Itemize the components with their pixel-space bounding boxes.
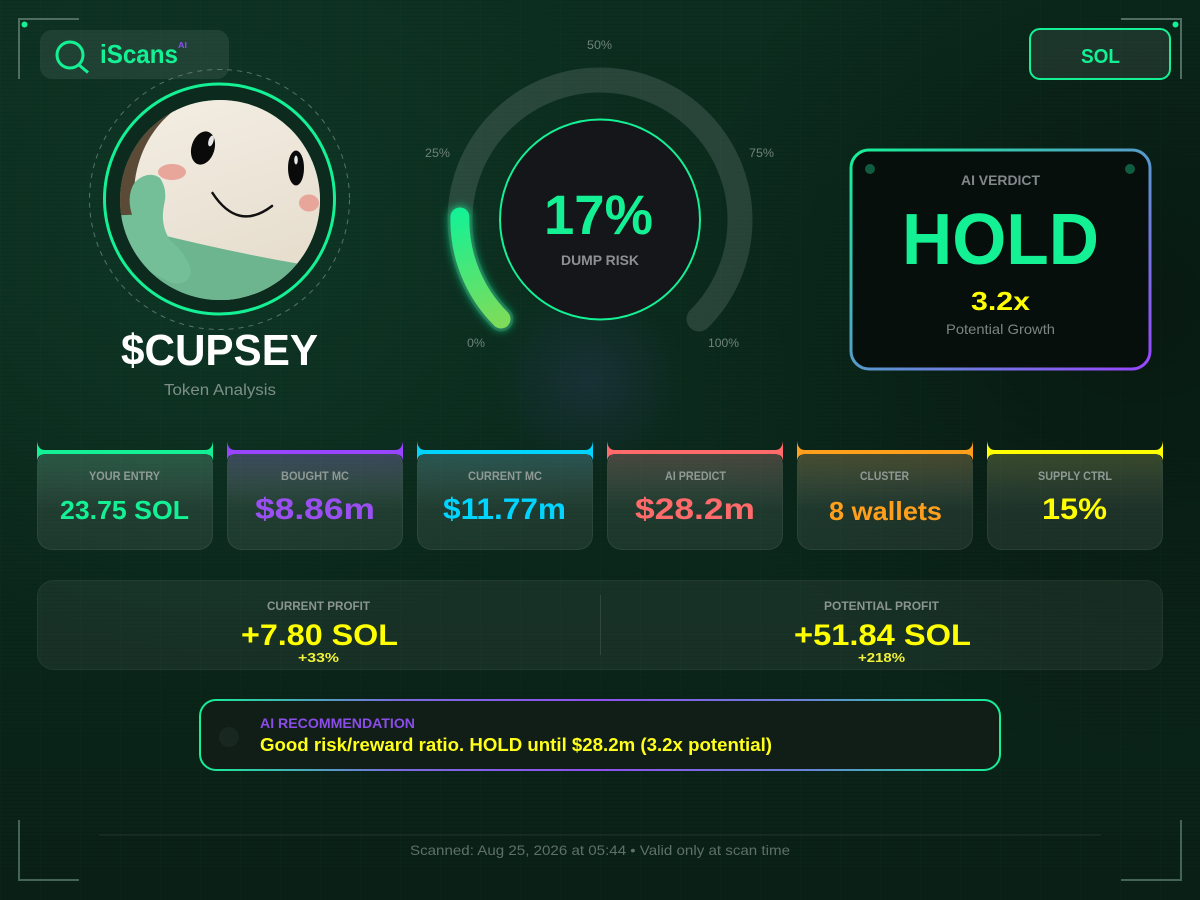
verdict value: HOLD [902,200,1099,280]
growth label: Potential Growth [946,321,1055,337]
icon: faint badge [219,727,239,747]
gauge value: 17% [544,183,653,246]
recommendation heading: AI RECOMMENDATION [260,715,415,731]
token subtitle: Token Analysis [164,382,276,399]
stat card: cluster: CLUSTER [860,469,909,483]
potential profit: POTENTIAL PROFIT [824,599,940,613]
stat card: supply control: 15% [1042,493,1107,526]
stat card: your entry: YOUR ENTRY [89,469,160,483]
stat card: cluster: 8 wallets [829,496,942,526]
token avatar [90,70,350,330]
stat card: current mc [417,441,593,550]
potential profit: +51.84 SOL [794,619,971,652]
corner bracket: top right [1121,19,1181,79]
verdict panel dots [865,164,1135,174]
current profit: +7.80 SOL [241,619,398,652]
gauge progress arc [460,217,501,319]
gauge scale labels: 0% [467,336,485,350]
chain badge: SOL [1030,29,1170,79]
eyes [190,131,216,165]
current profit: +33% [298,650,340,665]
stat card: bought mc: BOUGHT MC [281,469,349,483]
verdict heading: AI VERDICT [961,172,1040,188]
stat card: supply control [987,441,1163,550]
current profit [241,599,398,665]
gauge centre dial [500,120,700,320]
green ring [104,84,334,314]
gauge label: DUMP RISK [561,252,639,268]
icon: magnifier [57,42,88,72]
token name: $CUPSEY [121,326,318,375]
gauge progress glow [460,217,501,319]
chain badge: SOL: SOL [1081,46,1120,68]
gauge scale labels: 100% [708,336,739,350]
stat card: your entry [37,441,213,550]
gauge scale labels: 50% [587,38,612,52]
panel: profit summary [38,580,1162,670]
smile [212,193,272,216]
growth multiple: 3.2x [971,286,1031,316]
recommendation text: Good risk/reward ratio. HOLD until $28.2m (3.2x potential) [260,735,772,755]
gauge track [460,80,740,319]
gauge scale labels [425,38,774,350]
stat card: supply control: SUPPLY CTRL [1038,469,1112,483]
gauge scale labels: 25% [425,146,450,160]
panel: AI verdict [851,150,1150,369]
stat card: bought mc: $8.86m [255,493,375,526]
logo badge [40,30,229,79]
stat card: current mc: CURRENT MC [468,469,542,483]
corner bracket: top left [19,19,79,79]
hand [118,175,191,284]
potential profit [794,599,971,665]
cheeks [158,164,186,180]
gauge scale labels: 75% [749,146,774,160]
stat card: bought mc [227,441,403,550]
corner bracket: bottom right [1121,820,1181,880]
logo text: iScans [100,39,178,69]
logo superscript: AI [178,41,187,50]
stat card: AI predict [607,441,783,550]
stat card: current mc: $11.77m [443,493,566,526]
panel: AI recommendation [200,700,1000,770]
stat card: AI predict: $28.2m [635,493,755,526]
dump risk gauge [425,38,774,350]
potential profit: +218% [858,650,906,665]
stat card: your entry: 23.75 SOL [60,495,189,525]
stat card: AI predict: AI PREDICT [665,469,727,483]
mascot illustration [120,100,320,300]
stat card: cluster [797,441,973,550]
current profit: CURRENT PROFIT [267,599,371,613]
corner bracket: bottom left [19,820,79,880]
dashed outer ring [90,70,350,330]
footer: Scanned: Aug 25, 2026 at 05:44 • Valid only at scan time [410,842,790,858]
